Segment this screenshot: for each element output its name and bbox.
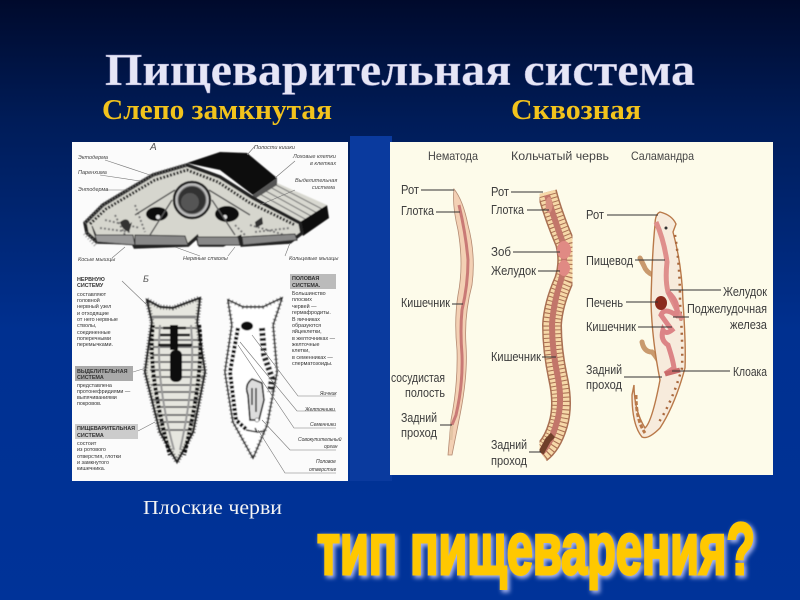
left captions: протонефридиями — [77, 389, 131, 395]
left captions: выпячиваниями [77, 395, 117, 401]
annelid labels: Желудок [491, 264, 536, 278]
column headings: Кольчатый червь [511, 149, 609, 163]
left captions: СИСТЕМА. [292, 283, 321, 289]
nematode labels: Рот [401, 183, 419, 197]
left captions [75, 274, 342, 473]
left captions: ПИЩЕВАРИТЕЛЬНАЯ [77, 426, 135, 432]
section A labels: Энтодерма [78, 187, 108, 193]
nematode labels: Глотка [401, 204, 434, 218]
nematode labels: Задний [401, 411, 437, 425]
left captions: в желточниках — [292, 336, 336, 342]
left captions: в семенниках — [292, 355, 333, 361]
nematode [448, 189, 473, 455]
worm B reproductive [225, 298, 282, 458]
left captions: и отходящие [77, 311, 109, 317]
left captions: орган [324, 444, 338, 450]
left captions: Семенники [310, 422, 336, 428]
section A labels: Кольцевые мышцы [289, 256, 338, 262]
nematode labels: сосудистая [391, 371, 445, 385]
left captions: Половое [316, 459, 336, 465]
left captions: СИСТЕМА [77, 433, 104, 439]
left captions: В яичниках [292, 317, 320, 323]
left captions: образуются [292, 323, 321, 329]
column headings: Нематода [428, 149, 478, 163]
left captions: и замкнутого [77, 460, 109, 466]
left captions: червей — [292, 303, 317, 310]
left captions: головной [77, 297, 100, 304]
column headings: Саламандра [631, 149, 694, 163]
salamander labels: Задний [586, 363, 622, 377]
annelid labels [491, 185, 560, 468]
left captions: поперечными [77, 336, 111, 342]
section A labels: А [149, 142, 157, 153]
left captions: яйцеклетки, [292, 328, 322, 335]
annelid [541, 192, 571, 453]
section A labels: система [312, 185, 335, 191]
left captions: покровов. [77, 401, 101, 407]
panel: flatworms [72, 142, 348, 481]
left captions: из ротового [77, 447, 106, 453]
annelid labels: Глотка [491, 203, 524, 217]
salamander [632, 212, 685, 438]
salamander labels: Кишечник [586, 320, 636, 334]
left captions: стволы, [77, 323, 97, 329]
section A labels: Выделительная [295, 178, 337, 184]
salamander labels: Рот [586, 208, 604, 222]
section A labels: Косые мышцы [78, 257, 115, 263]
section A labels [78, 142, 338, 263]
left captions: Большинство [292, 291, 326, 297]
salamander labels: железа [730, 318, 767, 332]
salamander labels: Пищевод [586, 254, 634, 268]
left captions: НЕРВНУЮ [77, 277, 105, 283]
left captions: состоит [77, 441, 97, 447]
salamander labels: Клоака [733, 365, 767, 379]
left captions: желточные [292, 342, 320, 348]
salamander labels: Желудок [723, 285, 767, 299]
left captions: от него нервные [77, 317, 118, 323]
title: Пищеварительная система [105, 45, 695, 95]
left captions: клетки, [292, 348, 310, 354]
annelid labels: Рот [491, 185, 509, 199]
salamander labels: Поджелудочная [687, 302, 767, 316]
left captions: представлена [77, 383, 112, 389]
salamander labels: проход [586, 378, 623, 392]
salamander labels: Печень [586, 296, 623, 310]
nematode labels [391, 183, 463, 440]
nematode labels: проход [401, 426, 438, 440]
left captions: соединенные [77, 330, 111, 336]
bright blue block between panels [350, 136, 392, 481]
section A labels: в клетках [310, 161, 336, 167]
left captions: СИСТЕМУ [77, 283, 104, 289]
left captions: СИСТЕМА [77, 375, 104, 381]
left captions: перемычками. [77, 342, 113, 348]
left captions: отверстия, глотки [77, 454, 121, 460]
left captions: Яичник [319, 391, 337, 397]
annelid labels: Кишечник [491, 350, 541, 364]
section A labels: Лоховые клетки [292, 154, 336, 160]
worm B nervous / excretory [145, 298, 205, 462]
left captions: ВЫДЕЛИТЕЛЬНАЯ [77, 369, 128, 375]
left captions: составляют [77, 292, 107, 298]
nematode labels: полость [405, 386, 445, 400]
cross-section illustration [85, 152, 329, 247]
left captions: кишечника. [77, 466, 105, 472]
left captions: ПОЛОВАЯ [292, 276, 319, 282]
section A labels: Полости кишки [254, 145, 295, 151]
annelid labels: проход [491, 454, 528, 468]
section A labels: Нервные стволы [183, 256, 228, 262]
nematode labels: Кишечник [401, 296, 450, 310]
annelid labels: Зоб [491, 245, 511, 259]
section A labels: Эктодерма [78, 155, 108, 161]
left captions: сперматозоиды. [292, 361, 332, 367]
left captions: Желточники [304, 407, 335, 413]
subheading: blind-ended: Слепо замкнутая [102, 95, 332, 126]
panel: through gut animals [390, 142, 773, 475]
left captions: гермафродиты. [292, 310, 331, 316]
left captions: нервный узел [77, 303, 111, 310]
left captions: Совокупительный [298, 436, 342, 443]
section A labels: Паренхима [78, 170, 107, 176]
annelid labels: Задний [491, 438, 527, 452]
left captions: Б [143, 274, 149, 284]
subheading: through: Сквозная [511, 95, 641, 126]
salamander labels [586, 208, 767, 392]
column headings [428, 149, 694, 163]
left captions: плоских [292, 297, 312, 303]
left captions: отверстие [309, 467, 336, 473]
caption: flatworms: Плоские черви [143, 498, 282, 519]
